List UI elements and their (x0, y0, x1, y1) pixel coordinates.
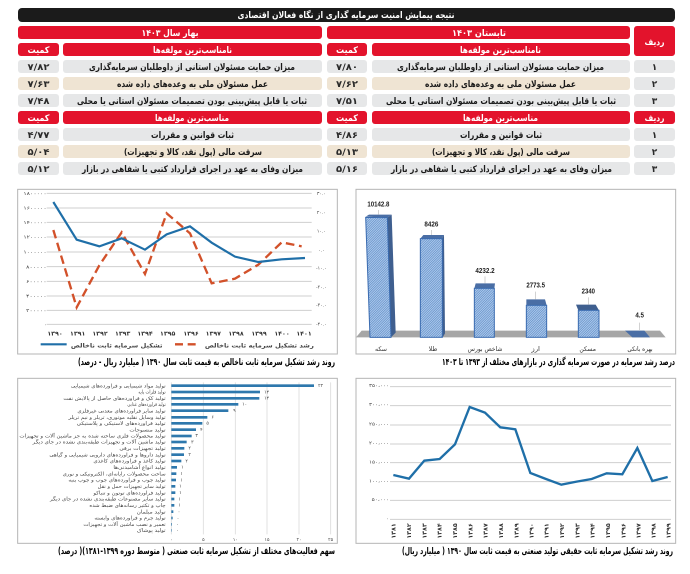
category labels: تعمیر و نصب ماشین آلات و تجهیزات (83, 521, 166, 528)
year axis labels: ۱۳۹۴ (137, 331, 153, 338)
y axis labels (369, 383, 389, 522)
value labels: ۳ (191, 439, 194, 445)
category labels: تولید فراورده‌های توتون و تنباکو (92, 490, 166, 496)
value labels: ۰ (176, 523, 179, 528)
value labels: ۱ (179, 491, 182, 496)
row: predictability of local decisions (63, 94, 322, 107)
header: quantity (327, 43, 367, 56)
row: contract commitment (372, 162, 630, 175)
value labels: ۱۴ (264, 390, 270, 395)
value labels: ۱ (178, 504, 181, 509)
value labels: ۱ (181, 466, 184, 471)
row number 1: ۱ (652, 131, 657, 141)
row: value 4.86 (327, 128, 367, 141)
category labels (19, 383, 166, 534)
row: value 4.86: ۴/۸۶ (336, 131, 358, 141)
category labels: تولید انواع آشامیدنی‌ها (113, 464, 166, 471)
left axis labels: ۱۰۰۰۰۰۰ (23, 251, 47, 256)
category labels: تولید چوب و فراورده‌های چوب و چوب پنبه (68, 478, 166, 484)
row: laws stability (372, 128, 630, 141)
row: laws stability: ثبات قوانین و مقررات (151, 131, 234, 141)
rotated year labels: ۱۳۹۵ (605, 523, 612, 539)
legend: رشد تشکیل سرمایه ثابت ناخالص (205, 342, 314, 349)
category labels: مسکن (579, 346, 596, 353)
row number 2: ۲ (652, 148, 658, 158)
legend: تشکیل سرمایه ثابت ناخالص (71, 342, 162, 349)
year axis labels: ۱۳۹۵ (160, 331, 176, 338)
chart: real industrial capital formation line chart (356, 378, 676, 543)
title bar (18, 8, 675, 22)
bar: stock index (474, 283, 495, 337)
year axis labels: ۱۴۰۰ (274, 331, 290, 338)
row: national officials promises (63, 77, 322, 90)
rotated year labels: ۱۳۹۴ (590, 523, 597, 539)
chart: market returns 3D bar chart (356, 189, 676, 354)
value labels: ۲ (185, 458, 188, 464)
row: value 7.62 (327, 77, 367, 90)
bar: coin (366, 215, 396, 337)
rotated year labels: ۱۳۸۸ (498, 523, 505, 539)
row: value 7.63 (18, 77, 59, 90)
row number 1 (634, 128, 675, 141)
value labels: ۱ (178, 497, 181, 502)
floor (356, 331, 666, 337)
rotated year labels (390, 523, 673, 539)
row: value 7.51: ۷/۵۱ (336, 97, 358, 107)
y axis labels: ۳۰۰،۰۰۰ (369, 402, 389, 408)
chart: share of activities horizontal bar chart (18, 378, 337, 543)
value labels: ۱۴ (264, 397, 270, 402)
row: financial theft (63, 145, 322, 158)
rotated year labels: ۱۳۹۰ (528, 523, 535, 539)
row: officials support: میزان حمایت مسئولان استانی از داوطلبان سرمایه‌گذاری (89, 61, 295, 73)
value labels: ۱ (180, 472, 183, 477)
x axis labels: ۵ (202, 538, 205, 543)
row: value 5.16 (327, 162, 367, 175)
value labels: ۶ (211, 415, 214, 420)
year axis labels: ۱۳۹۹ (251, 331, 267, 338)
title bar: نتیجه پیمایش امنیت سرمایه گذاری از نگاه فعالان اقتصادی (238, 9, 454, 21)
rotated year labels: ۱۳۸۳ (421, 523, 428, 539)
right axis labels: -۴۰.۰ (316, 323, 327, 328)
category labels: تولید تجهیزات برقی (119, 446, 166, 452)
left axis labels (23, 192, 47, 328)
row: contract commitment (63, 162, 322, 175)
rotated year labels: ۱۳۸۶ (467, 523, 474, 539)
category labels: تولید پوشاک (137, 527, 166, 534)
left axis labels: ۱۴۰۰۰۰۰ (23, 221, 47, 226)
row: value 5.12: ۵/۱۲ (28, 165, 50, 175)
category labels: سکه (375, 346, 387, 353)
row: laws stability: ثبات قوانین و مقررات (460, 131, 542, 141)
row: value 7.82 (18, 60, 59, 73)
right axis labels: ۱۰.۰ (317, 229, 326, 234)
header: least suitable components: نامناسب‌ترین مولفه‌ها (153, 46, 232, 56)
heading: summer 1403: تابستان ۱۴۰۳ (452, 29, 506, 39)
header: least suitable components (63, 43, 322, 56)
panel: summer 1403 table (327, 26, 630, 175)
category labels: تولید مبلمان (137, 509, 166, 515)
orange dashed growth line (53, 213, 302, 307)
row: value 4.77: ۴/۷۷ (28, 131, 50, 141)
y axis labels: ۱۵۰،۰۰۰ (369, 460, 389, 465)
value labels: ۱۰ (242, 403, 247, 408)
year axis labels: ۱۳۹۳ (115, 331, 131, 338)
row: officials support (372, 60, 630, 73)
heading: spring 1403 (18, 26, 322, 39)
right axis labels: -۱۰.۰ (316, 267, 327, 272)
year axis labels: ۱۳۹۷ (206, 331, 221, 338)
right axis labels: ۳۰.۰ (317, 191, 326, 197)
row: predictability of local decisions: ثبات یا قابل پیش‌بینی بودن تصمیمات مسئولان استانی یا محلی (77, 97, 307, 107)
left axis labels: ۶۰۰۰۰۰ (26, 280, 47, 285)
heading: spring 1403: بهار سال ۱۴۰۳ (142, 29, 198, 39)
rotated year labels: ۱۳۸۱ (390, 523, 397, 539)
heading: summer 1403 (327, 26, 630, 39)
rotated year labels: ۱۳۹۳ (574, 523, 581, 539)
value labels: ۳ (195, 433, 198, 439)
y axis labels: ۲۰۰،۰۰۰ (369, 440, 389, 446)
value labels: 2773.5 (526, 283, 545, 290)
header: most suitable components: مناسب‌ترین مولفه‌ها (155, 114, 229, 124)
x axis labels: ۲۵ (328, 537, 334, 543)
value labels: ۱ (180, 478, 183, 483)
year axis labels: ۱۴۰۱ (296, 331, 312, 338)
year axis labels: ۱۳۹۸ (228, 331, 244, 338)
rotated year labels: ۱۳۹۸ (651, 523, 658, 539)
y axis labels: ۵۰،۰۰۰ (372, 498, 389, 503)
row: contract commitment: میزان وفای به عهد در اجرای قرارداد کتبی یا شفاهی در بازار (390, 165, 612, 175)
row: value 5.16: ۵/۱۶ (336, 165, 358, 175)
row: value 7.48: ۷/۴۸ (28, 97, 50, 107)
row: value 7.80 (327, 60, 367, 73)
left axis labels: ۲۰۰۰۰۰ (26, 308, 47, 314)
rotated year labels: ۱۳۹۱ (544, 523, 551, 539)
header: least suitable components (372, 43, 630, 56)
y axis labels: ۳۵۰،۰۰۰ (369, 383, 389, 389)
category labels: تولید منسوجات (129, 427, 166, 433)
category labels: ارز (530, 346, 540, 353)
rotated year labels: ۱۳۸۹ (513, 523, 520, 539)
value labels: 8426 (424, 222, 438, 229)
row: value 5.04 (18, 145, 59, 158)
row number 3 (634, 162, 675, 175)
bar: housing (576, 305, 599, 337)
header: quantity (18, 111, 59, 124)
value labels: ۹ (233, 409, 236, 414)
header: quantity: کمیت (28, 46, 50, 56)
year axis labels (47, 331, 312, 338)
category labels: تولید سایر تجهیزات حمل و نقل (98, 484, 166, 490)
row: value 7.82: ۷/۸۲ (28, 63, 50, 73)
caption: share of activities chart: سهم فعالیت‌های مختلف از تشکیل سرمایه ثابت صنعتی ( متوسط دوره ۱۳۹۹-۱۳۸۱)( درصد) (58, 546, 335, 557)
row: predictability of local decisions: ثبات یا قابل پیش‌بینی بودن تصمیمات مسئولان استانی یا محلی (386, 97, 616, 107)
row: value 7.62: ۷/۶۲ (336, 80, 359, 90)
category labels: تولید فلزات پایه (138, 390, 166, 396)
bar: bank interest (625, 331, 650, 337)
value labels: ۰ (177, 516, 179, 521)
category labels: تولید فراورده‌های غذایی (127, 402, 166, 408)
right axis labels: -۲۰.۰ (316, 284, 327, 290)
row number 1: ۱ (652, 63, 657, 73)
header: row (634, 111, 675, 124)
left axis labels: ۱۶۰۰۰۰۰ (23, 207, 47, 212)
chart: gross fixed capital formation line chart (18, 189, 337, 354)
value labels: 2340 (582, 289, 595, 296)
row number 2 (634, 77, 675, 90)
row: financial theft: سرقت مالی (پول نقد، کالا و تجهیزات) (432, 148, 570, 158)
row number 1 (634, 60, 675, 73)
right axis labels: ۰.۰ (318, 248, 325, 253)
row: financial theft (372, 145, 630, 158)
header: row (634, 26, 675, 56)
value labels: ۲۲ (318, 383, 324, 389)
row: contract commitment: میزان وفای به عهد در اجرای قرارداد کتبی یا شفاهی در بازار (81, 165, 303, 175)
category labels: تولید داروها و فراورده‌های دارویی شیمیایی و گیاهی (49, 451, 166, 458)
x axis labels (170, 537, 334, 543)
rotated year labels: ۱۳۹۷ (636, 523, 643, 539)
rotated year labels: ۱۳۸۲ (406, 523, 413, 539)
blue capital formation line (53, 202, 305, 262)
rotated year labels: ۱۳۸۷ (483, 523, 490, 539)
row number 3: ۳ (652, 165, 658, 175)
category labels: ساخت محصولات رایانه‌ای، الکترونیکی و نوری (63, 471, 166, 477)
row: value 4.77 (18, 128, 59, 141)
legend (41, 342, 314, 349)
row: value 7.63: ۷/۶۳ (28, 80, 50, 90)
header: quantity (327, 111, 367, 124)
x axis labels: ۱۰ (233, 538, 238, 543)
right axis labels: -۳۰.۰ (316, 303, 327, 309)
row: value 7.80: ۷/۸۰ (336, 63, 358, 73)
row: value 5.12 (18, 162, 59, 175)
right axis labels (316, 191, 327, 328)
category labels: تولید مواد شیمیایی و فراورده‌های شیمیایی (71, 383, 166, 389)
year axis labels: ۱۳۹۲ (92, 331, 108, 338)
category labels: تولید سایر مصنوعات طبقه‌بندی نشده در جای دیگر (49, 496, 166, 503)
row: value 7.51 (327, 94, 367, 107)
value labels: 4232.2 (475, 268, 495, 275)
year axis labels: ۱۳۹۶ (183, 331, 199, 338)
row: national officials promises: عمل مسئولان ملی به وعده‌های داده شده (117, 80, 268, 90)
category labels: تولید چرم و فراورده‌های وابسته (94, 516, 166, 522)
left axis labels: ۴۰۰۰۰۰ (26, 295, 47, 300)
x axis labels: ۱۵ (264, 538, 270, 543)
value labels (367, 202, 644, 330)
category labels: تولید کک و فراورده‌های حاصل از پالایش نفت (63, 396, 166, 402)
row: value 7.48 (18, 94, 59, 107)
y axis labels: ۰ (386, 517, 389, 522)
header: most suitable components (63, 111, 322, 124)
row number 2: ۲ (652, 80, 658, 90)
blue trend line (393, 407, 668, 485)
caption: gross fixed capital chart: روند رشد تشکیل سرمایه ثابت ناخالص به قیمت ثابت سال ۱۳۹۰ ( میلیارد ریال - درصد) (78, 357, 335, 368)
value labels: ۰ (178, 510, 180, 515)
header: most suitable components (372, 111, 630, 124)
category labels: طلا (429, 346, 437, 353)
row: officials support: میزان حمایت مسئولان استانی از داوطلبان سرمایه‌گذاری (397, 61, 604, 73)
header: row: ردیف (644, 114, 664, 124)
category labels (375, 346, 653, 353)
bars (171, 384, 314, 532)
panel: row number column (634, 26, 675, 175)
left axis labels: ۸۰۰۰۰۰ (26, 265, 47, 270)
value labels: ۵ (206, 422, 209, 427)
row: national officials promises (372, 77, 630, 90)
right axis labels: ۲۰.۰ (317, 210, 326, 216)
x axis labels: ۰ (170, 538, 173, 543)
value labels: 4.5 (635, 312, 644, 319)
left axis labels: ۱۲۰۰۰۰۰ (23, 235, 47, 241)
category labels: شاخص بورس (468, 346, 502, 353)
category labels: تولید فراورده‌های لاستیکی و پلاستیکی (77, 421, 166, 427)
row: financial theft: سرقت مالی (پول نقد، کالا و تجهیزات) (124, 148, 262, 158)
value labels: ۴ (200, 428, 203, 433)
category labels: بهره بانکی (627, 346, 653, 353)
row: officials support (63, 60, 322, 73)
value labels (176, 383, 324, 534)
left axis labels: ۰ (44, 323, 47, 328)
header: most suitable components: مناسب‌ترین مولفه‌ها (463, 114, 538, 124)
header: row: ردیف (644, 38, 664, 48)
row: laws stability (63, 128, 322, 141)
header: quantity (18, 43, 59, 56)
row: value 5.13 (327, 145, 367, 158)
value labels: ۲ (188, 452, 191, 458)
header: quantity: کمیت (336, 114, 359, 124)
row number 2 (634, 145, 675, 158)
category labels: تولید ماشین آلات و تجهیزات طبقه‌بندی نشده در جای دیگر (32, 439, 166, 446)
rotated year labels: ۱۳۹۶ (620, 523, 627, 539)
bar: currency (526, 299, 547, 337)
rotated year labels: ۱۳۸۵ (452, 523, 459, 539)
value labels: ۱ (179, 485, 182, 490)
row: predictability of local decisions (372, 94, 630, 107)
value labels: ۲ (188, 446, 191, 452)
row number 3: ۳ (652, 97, 658, 107)
bar: gold (420, 235, 445, 337)
y axis labels: ۱۰۰،۰۰۰ (369, 479, 389, 484)
row: value 5.04: ۵/۰۴ (28, 148, 50, 158)
rotated year labels: ۱۳۸۴ (437, 523, 444, 539)
rotated year labels: ۱۳۹۲ (559, 523, 566, 539)
header: least suitable components: نامناسب‌ترین مولفه‌ها (460, 46, 541, 56)
row: national officials promises: عمل مسئولان ملی به وعده‌های داده شده (425, 80, 576, 90)
value labels: ۰ (176, 529, 179, 534)
category labels: تولید سایر فراورده‌های معدنی غیرفلزی (77, 408, 166, 414)
category labels: تولید وسایل نقلیه موتوری، تریلر و نیم تریلر (67, 415, 166, 421)
category labels: چاپ و تکثیر رسانه‌های ضبط شده (89, 503, 166, 509)
left axis labels: ۱۸۰۰۰۰۰ (23, 192, 47, 197)
row number 3 (634, 94, 675, 107)
header: quantity: کمیت (28, 114, 50, 124)
value labels: 10142.8 (367, 202, 389, 209)
rotated year labels: ۱۳۹۹ (666, 523, 673, 539)
year axis labels: ۱۳۹۱ (70, 331, 85, 338)
year axis labels: ۱۳۹۰ (47, 331, 63, 338)
category labels: تولید محصولات فلزی ساخته شده به جز ماشین آلات و تجهیزات (19, 433, 166, 440)
x axis labels: ۲۰ (296, 537, 302, 543)
header: quantity: کمیت (336, 46, 359, 56)
row: value 5.13: ۵/۱۳ (336, 148, 359, 158)
y axis labels: ۲۵۰،۰۰۰ (369, 421, 389, 427)
category labels: تولید کاغذ و فراورده‌های کاغذی (93, 459, 166, 465)
panel: spring 1403 table (18, 26, 322, 175)
